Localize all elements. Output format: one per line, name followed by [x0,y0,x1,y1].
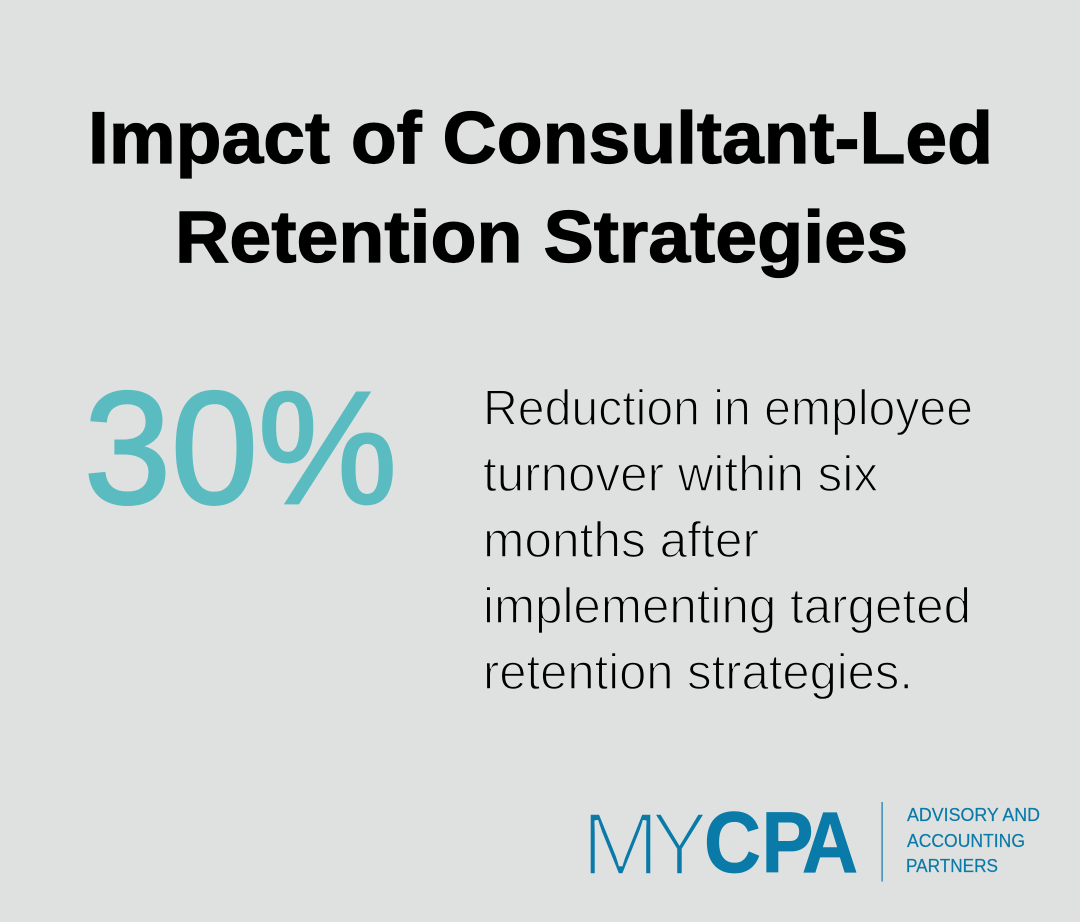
title [88,98,993,278]
statistic description: months after [483,512,759,568]
statistic description: implementing targeted [483,578,971,634]
logo wordmark: MY: M [581,795,660,895]
statistic description: turnover within six [483,446,878,502]
logo divider [882,802,883,882]
statistic description: retention strategies. [483,644,913,700]
logo wordmark: CPA: P [762,795,814,891]
statistic description: Reduction in employee [483,380,973,436]
logo wordmark: CPA [704,795,858,891]
logo tagline: PARTNERS [906,856,998,876]
logo wordmark: CPA: C [704,795,761,891]
logo: MyCPA Advisory and Accounting Partners [581,795,1040,895]
title: Impact of Consultant-Led [88,98,993,179]
statistic description [483,380,973,700]
logo wordmark: CPA: A [802,795,858,891]
logo wordmark: MY [581,795,708,895]
statistic: 30%: 30% [84,358,397,537]
title: Retention Strategies [175,197,908,278]
logo tagline: ADVISORY AND [907,805,1040,825]
logo wordmark: MY: Y [651,795,708,895]
logo tagline: ACCOUNTING [907,831,1025,851]
logo tagline [906,805,1040,876]
